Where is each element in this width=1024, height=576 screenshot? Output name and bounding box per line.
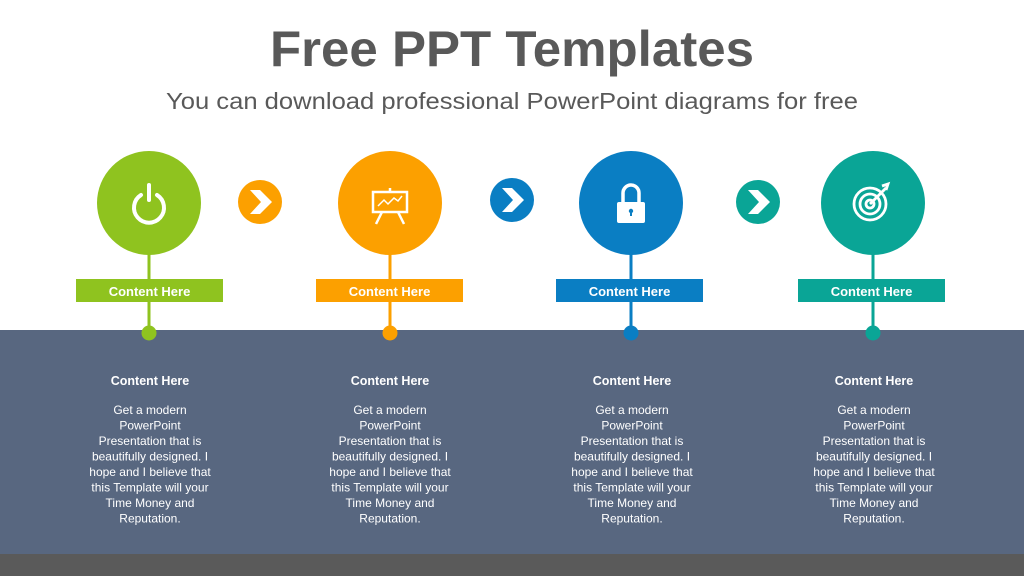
text block 4 [813,374,935,526]
text block 2: this Template will your [331,480,449,494]
text block 1: this Template will your [91,480,209,494]
text block 1: hope and I believe that [89,465,211,479]
text block 3: PowerPoint [601,418,663,432]
text block 2: PowerPoint [359,418,421,432]
text block 4: this Template will your [815,480,933,494]
text block 1: Presentation that is [99,434,201,448]
text block 2: Presentation that is [339,434,441,448]
text block 2: Content Here [351,374,429,388]
arrow 1 [238,180,282,224]
text block 4: beautifully designed. I [816,450,932,464]
text block 2: Get a modern [353,403,427,417]
text block 4: Reputation. [843,512,905,526]
subtitle: You can download professional PowerPoint diagrams for free [166,88,858,114]
text block 3: Reputation. [601,512,663,526]
icon: power [134,185,164,223]
label bar 2 [316,279,463,302]
icon: target [854,184,888,220]
label bar 4 [798,279,945,302]
label bar 1: Content Here [109,284,190,299]
text block 2: Reputation. [359,512,421,526]
text block 2: Time Money and [346,496,434,510]
text block 4: hope and I believe that [813,465,935,479]
label bar 4: Content Here [831,284,912,299]
label bar 3: Content Here [589,284,670,299]
icon: padlock [617,185,645,223]
text block 1: Time Money and [106,496,194,510]
text block 3: this Template will your [573,480,691,494]
text block 2: hope and I believe that [329,465,451,479]
label bar 1 [76,279,223,302]
bottom strip [0,554,1024,576]
title: Free PPT Templates [270,21,754,77]
text block 4: PowerPoint [843,418,905,432]
arrow 2 [490,178,534,222]
text block 1: Get a modern [113,403,187,417]
text block 1: PowerPoint [119,418,181,432]
text block 3: Get a modern [595,403,669,417]
text block 4: Content Here [835,374,913,388]
text block 3: Time Money and [588,496,676,510]
text block 3 [571,374,693,526]
label bar 2: Content Here [349,284,430,299]
text block 4: Presentation that is [823,434,925,448]
step 3 [556,151,703,340]
text block 4: Time Money and [830,496,918,510]
step 4 [798,151,945,340]
text block 2 [329,374,451,526]
background band [0,330,1024,554]
text block 3: Presentation that is [581,434,683,448]
text block 2: beautifully designed. I [332,450,448,464]
text block 1: Reputation. [119,512,181,526]
text block 3: Content Here [593,374,671,388]
text block 3: beautifully designed. I [574,450,690,464]
text block 3: hope and I believe that [571,465,693,479]
text block 1: beautifully designed. I [92,450,208,464]
arrow 3 [736,180,780,224]
text block 4: Get a modern [837,403,911,417]
text block 1 [89,374,211,526]
label bar 3 [556,279,703,302]
step 2 [316,151,463,340]
text block 1: Content Here [111,374,189,388]
step 1 [76,151,223,340]
icon: presentation board [373,188,407,224]
